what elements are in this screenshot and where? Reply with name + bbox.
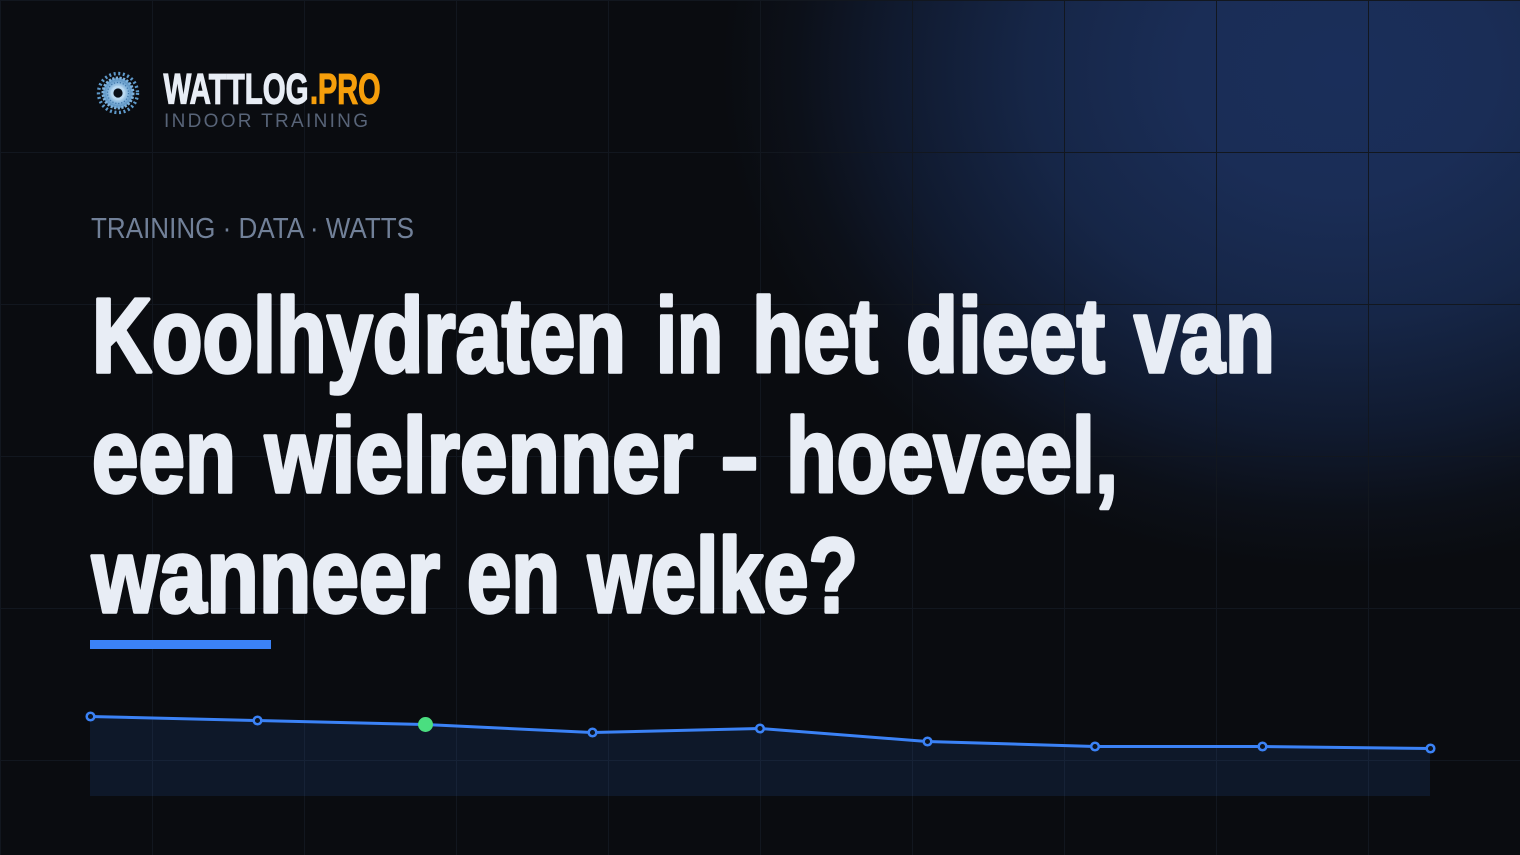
- title: welke?: [587, 517, 858, 635]
- title: een: [92, 397, 236, 515]
- highlighted data point: [418, 717, 433, 732]
- title accent bar: [90, 640, 271, 649]
- logo tagline: INDOOR TRAINING: [164, 111, 368, 132]
- logo wordmark: WATTLOG: [164, 66, 308, 114]
- title: Koolhydraten: [92, 277, 626, 395]
- title: het: [752, 277, 878, 395]
- logo: [98, 66, 380, 132]
- logo wordmark: .PRO: [310, 66, 380, 114]
- eyebrow: TRAINING · DATA · WATTS: [91, 213, 414, 245]
- icon: bike cassette gear: [98, 74, 138, 112]
- title: wanneer: [91, 517, 440, 635]
- power line chart: [87, 713, 1434, 796]
- chart area fill: [90, 716, 1430, 796]
- chart line: [90, 716, 1430, 748]
- title: van: [1134, 277, 1275, 395]
- title: wielrenner: [264, 397, 693, 515]
- title: –: [722, 397, 757, 515]
- title: en: [467, 517, 560, 635]
- title: in: [656, 277, 723, 395]
- chart data points: [87, 713, 1434, 752]
- title: [91, 277, 1275, 635]
- title: dieet: [906, 277, 1105, 395]
- title: hoeveel,: [786, 397, 1118, 515]
